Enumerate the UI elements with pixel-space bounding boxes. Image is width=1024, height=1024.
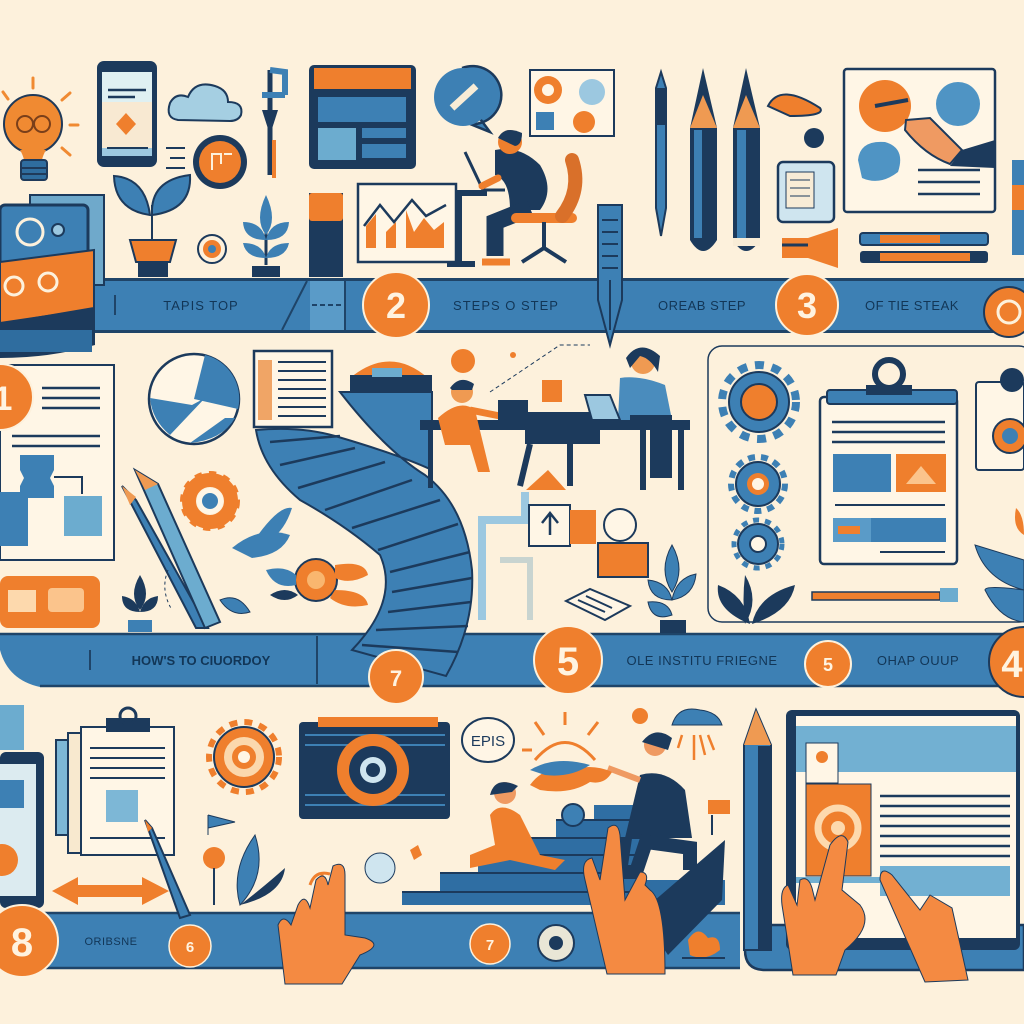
icon: orange badge [166, 135, 247, 189]
icon: camera right edge [976, 368, 1024, 535]
badge: small 7 [470, 924, 510, 964]
icon: clipboard stack [56, 708, 190, 918]
badge: number 4 [989, 627, 1024, 697]
icon: browser window [309, 65, 416, 169]
icon: knob [538, 925, 574, 961]
icon: pin tool [262, 70, 285, 178]
icon: pencil tall [744, 710, 771, 950]
icon: hand center [584, 825, 665, 974]
illustration: stairs with people [402, 732, 730, 912]
icon: right plant [975, 545, 1024, 622]
badge: edge marker [984, 287, 1024, 337]
icon: two pencils [122, 470, 220, 628]
icon: small plants [122, 570, 250, 632]
icon: orange gear [183, 474, 237, 528]
icon: swirl badge [198, 235, 226, 263]
badge: small 6 [169, 925, 211, 967]
badge: number 4: 4 [1001, 644, 1023, 686]
icon: large pencil left [690, 68, 717, 251]
label: top ribbon 4: OF TIE STEAK [865, 298, 959, 313]
icon: leafy plant [243, 195, 289, 277]
icon: speech bubble [434, 66, 501, 132]
panel: step 1 document [0, 364, 114, 560]
callout: EPIS bubble: EPIS [471, 733, 505, 750]
label: top ribbon 2: STEPS O STEP [453, 298, 559, 313]
chart: pie circle [149, 354, 239, 444]
icon: markers [860, 233, 988, 263]
badge: number 3: 3 [797, 285, 817, 326]
icon: potted plant large [114, 175, 190, 277]
illustration: person at laptop [445, 130, 575, 264]
icon: sunrise [522, 712, 612, 791]
icon: smartphone [97, 61, 157, 167]
icon: bird and flower [232, 508, 368, 606]
icon: hand on tablet right [880, 871, 968, 982]
callout: EPIS bubble [462, 718, 514, 762]
icon: pipe and lock [482, 470, 648, 620]
icon: right edge tool [1012, 160, 1024, 255]
band: bottom ribbon [0, 840, 1024, 970]
badge: number 6 [805, 641, 851, 687]
label: top ribbon 3: OREAB STEP [658, 298, 746, 313]
icon: center plant [648, 545, 696, 633]
icon: camera [299, 717, 450, 819]
badge: number 8 [0, 905, 58, 977]
label: how to: HOW'S TO CIUORDOY [132, 653, 271, 668]
icon: orange flower at bottom [682, 931, 725, 958]
band: middle ribbon [0, 634, 1024, 687]
icon: light bulb [3, 78, 78, 180]
label: middle ribbon 3: OHAP OUUP [877, 653, 959, 668]
icon: machine on desk [350, 362, 432, 393]
icon: left tablet [0, 705, 44, 908]
icon: cloud [169, 84, 241, 121]
badge: number 2 [363, 272, 429, 338]
badge: number 8: 8 [11, 921, 33, 965]
icon: device stack [768, 94, 838, 268]
badge: number 2: 2 [386, 285, 406, 326]
label: top ribbon 1: TAPIS TOP [163, 298, 239, 313]
badge: number 5 [534, 626, 602, 694]
panel: document on desk [254, 351, 332, 427]
badge: number 5: 5 [557, 640, 579, 684]
icon: orange folder [0, 576, 100, 628]
illustration: team at desk [420, 345, 690, 490]
badge: number 3 [776, 274, 838, 336]
label: bottom ribbon 1: ORIBSNE [84, 936, 138, 948]
icon: stacked papers [566, 589, 630, 620]
illustration: winding road [256, 392, 472, 676]
icon: bottom flora [203, 815, 422, 905]
badge: small 6: 6 [186, 939, 194, 956]
badge: number 6: 5 [823, 655, 833, 675]
panel: gears and clipboard [708, 346, 1024, 624]
icon: big gear [209, 722, 279, 792]
badge: number 7: 7 [390, 666, 402, 691]
icon: double arrow [52, 877, 169, 905]
badge: number 7 [369, 650, 423, 704]
label: middle ribbon 2: OLE INSTITU FRIEGNE [626, 653, 778, 668]
icon: collage card [530, 70, 614, 136]
icon: hand on tablet left [782, 836, 865, 975]
panel: hand pointing card [844, 69, 995, 212]
badge: small 7: 7 [486, 937, 494, 954]
icon: left binder stack [0, 195, 104, 358]
panel: tablet screen [786, 710, 1020, 950]
icon: tall pillar [309, 193, 343, 277]
band: top ribbon [90, 278, 1024, 333]
icon: ruler post [598, 205, 622, 345]
icon: large pencil right [733, 68, 760, 251]
chart: line chart panel [358, 184, 456, 262]
icon: small cloud rain [632, 708, 722, 760]
icon: hand left [278, 864, 374, 984]
icon: thin pencil [656, 72, 666, 236]
